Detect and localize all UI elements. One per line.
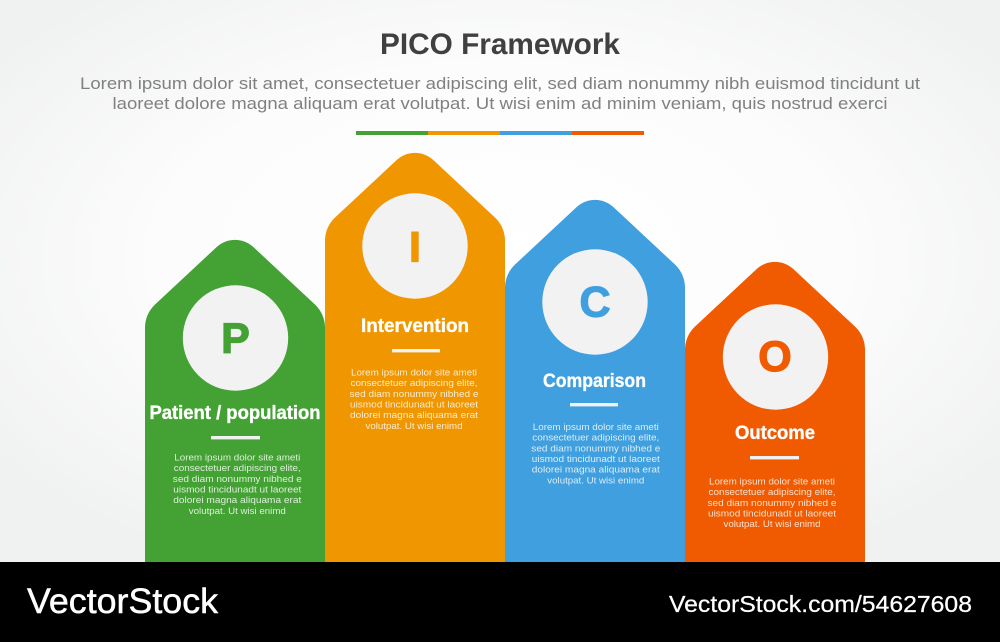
text block: outcome description: consectetuer adipiscing elite, bbox=[708, 486, 836, 497]
text block: comparison description: dolorei magna aliquama erat bbox=[532, 464, 660, 475]
panel: patient / population bbox=[145, 240, 325, 562]
text block: intervention description bbox=[350, 366, 478, 431]
text block: patient description: Lorem ipsum dolor site ameti bbox=[174, 452, 300, 462]
text block: comparison description: uismod tincidunadt ut laoreet bbox=[532, 453, 660, 464]
panel: intervention bbox=[325, 153, 505, 562]
text block: comparison description: sed diam nonummy nibhed e bbox=[531, 442, 660, 453]
text block: comparison description: volutpat. Ut wisi enimd bbox=[547, 474, 644, 485]
heading: patient / population: Patient / population bbox=[150, 403, 320, 424]
text block: comparison description bbox=[531, 421, 660, 485]
icon: letter P circle: P bbox=[221, 315, 250, 363]
footer logo text: VectorStock bbox=[27, 582, 219, 621]
panel: comparison bbox=[505, 200, 685, 562]
text block: intervention description: volutpat. Ut wisi enimd bbox=[366, 420, 462, 431]
icon: letter O circle: O bbox=[758, 333, 792, 381]
text block: patient description: uismod tincidunadt ut laoreet bbox=[173, 484, 302, 494]
text block: patient description: dolorei magna aliquama erat bbox=[173, 494, 302, 505]
text block: intervention description: consectetuer adipiscing elite, bbox=[350, 377, 478, 388]
icon: letter P circle bbox=[183, 285, 288, 391]
title: PICO Framework bbox=[380, 28, 620, 61]
text block: patient description bbox=[173, 452, 302, 516]
icon: letter C circle: C bbox=[579, 278, 611, 326]
heading: intervention: Intervention bbox=[361, 316, 469, 337]
text block: outcome description bbox=[708, 476, 836, 529]
text block: patient description: consectetuer adipiscing elite, bbox=[174, 462, 301, 473]
heading: outcome: Outcome bbox=[735, 423, 815, 444]
colored title divider bbox=[356, 131, 644, 135]
icon: letter O circle bbox=[723, 304, 828, 410]
icon: letter I circle bbox=[362, 193, 468, 299]
subtitle text: Lorem ipsum dolor sit amet, consectetuer adipiscing elit, sed diam nonummy nibh euismod tincidunt ut bbox=[80, 74, 920, 93]
watermark footer bar bbox=[0, 562, 1000, 642]
text block: outcome description: volutpat. Ut wisi enimd bbox=[724, 518, 820, 529]
text block: patient description: sed diam nonummy nibhed e bbox=[173, 473, 302, 484]
heading: comparison: Comparison bbox=[543, 371, 646, 392]
subtitle text bbox=[80, 74, 920, 113]
text block: outcome description: sed diam nonummy nibhed e bbox=[708, 497, 836, 508]
subtitle text: laoreet dolore magna aliquam erat volutpat. Ut wisi enim ad minim veniam, quis nostrud exerci bbox=[112, 94, 888, 113]
panel: outcome bbox=[685, 262, 865, 562]
text block: intervention description: Lorem ipsum dolor site ameti bbox=[351, 366, 477, 378]
icon: letter C circle bbox=[542, 249, 648, 355]
text block: intervention description: dolorei magna aliquama erat bbox=[350, 409, 478, 420]
text block: patient description: volutpat. Ut wisi enimd bbox=[189, 505, 286, 516]
footer url text: VectorStock.com/54627608 bbox=[669, 591, 972, 617]
text block: outcome description: Lorem ipsum dolor site ameti bbox=[709, 476, 835, 486]
icon: letter I circle: I bbox=[409, 224, 421, 272]
text block: intervention description: uismod tincidunadt ut laoreet bbox=[350, 398, 478, 410]
text block: outcome description: uismod tincidunadt ut laoreet bbox=[708, 508, 836, 518]
text block: intervention description: sed diam nonummy nibhed e bbox=[350, 388, 478, 399]
text block: comparison description: Lorem ipsum dolor site ameti bbox=[533, 421, 659, 432]
text block: comparison description: consectetuer adipiscing elite, bbox=[532, 432, 659, 443]
